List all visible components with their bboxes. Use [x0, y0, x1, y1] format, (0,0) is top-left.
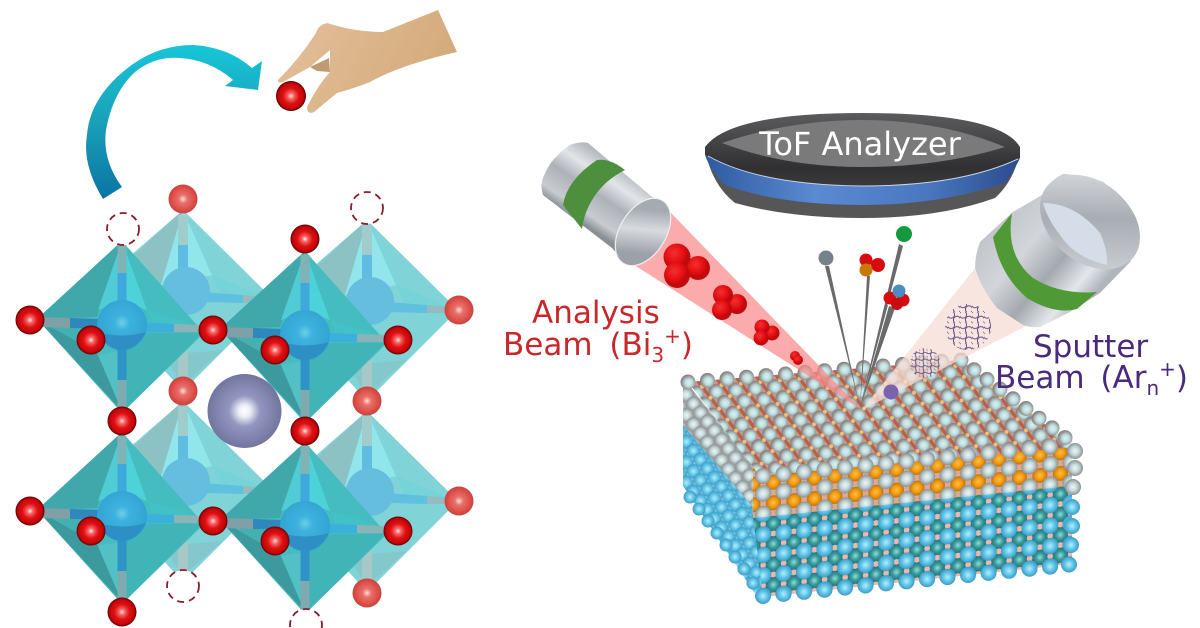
left face bottom edge atoms: [684, 490, 760, 590]
green ion: [896, 226, 912, 242]
icon: hand holding oxygen atom: [276, 10, 457, 113]
top surface: [688, 360, 1075, 476]
blue band: [705, 155, 1020, 205]
Bi cluster small: [754, 320, 780, 346]
gun end face: [1021, 155, 1159, 289]
Bi cluster large: [664, 244, 710, 288]
Ar cluster medium: [910, 348, 940, 378]
ToF analyzer: [705, 113, 1020, 218]
oxygen atom in hand: [276, 81, 306, 111]
analyzer top face: [722, 120, 1005, 167]
grey ion: [818, 250, 834, 266]
label: analysis beam: Analysis: [532, 295, 660, 331]
analyzer label: ToF Analyzer: [758, 125, 962, 163]
front face right edge atoms: [1063, 460, 1083, 553]
front face upper layer: [753, 436, 1072, 518]
analyzer body: [705, 150, 1020, 218]
front edge atoms: [755, 439, 1083, 484]
central A-site atom: [208, 374, 282, 448]
label: analysis beam: +: [664, 324, 681, 348]
Bi cluster medium: [712, 285, 747, 320]
front octahedra: [37, 241, 387, 614]
rim highlight: [708, 156, 1018, 186]
gun lens: [1043, 203, 1107, 265]
analyzer rim: [705, 113, 1020, 186]
ion tracks: [825, 244, 903, 408]
ejected ions: [818, 226, 912, 408]
front face bottom edge atoms: [755, 556, 1077, 604]
red and orange molecule: [860, 254, 885, 276]
label: analysis beam: ): [681, 327, 693, 363]
gun lens: [604, 188, 682, 276]
left face lower layer: [683, 425, 762, 600]
analysis beam: [631, 213, 862, 410]
beam cone: [862, 268, 1026, 410]
front oxygen atoms: [16, 224, 412, 626]
gun green band: [563, 160, 625, 229]
sputter gun: [975, 155, 1159, 327]
panel: perovskite crystal structure: [16, 184, 474, 628]
label: analysis beam: 3: [651, 343, 664, 367]
hand: [278, 10, 457, 113]
finger shadow: [310, 58, 330, 72]
label: sputter beam: ): [1176, 360, 1188, 396]
top surface back and right edge atoms: [680, 352, 1072, 445]
gun green band: [993, 213, 1097, 311]
left face upper layer: [683, 378, 762, 530]
label: sputter beam: +: [1159, 357, 1176, 381]
gun body: [542, 142, 670, 263]
curved arrow: [86, 45, 262, 199]
label: sputter beam: n: [1146, 376, 1159, 400]
analysis gun: [542, 142, 682, 276]
beam cone: [631, 213, 862, 410]
red and blue molecule: [884, 284, 910, 310]
label: sputter beam: Sputter: [1033, 329, 1148, 365]
Bi cluster smallest: [790, 351, 803, 365]
Ar cluster large: [945, 304, 991, 350]
label: sputter beam: Beam (Ar: [995, 360, 1147, 396]
sputter beam: [862, 268, 1026, 410]
back oxygen atoms: [168, 184, 474, 608]
Ar cluster small: [884, 384, 898, 400]
oxygen vacancies: [107, 192, 383, 628]
sample lattice block: [680, 352, 1083, 604]
label: analysis beam: Beam (Bi: [503, 327, 651, 363]
back octahedra: [91, 210, 458, 592]
gun body: [975, 174, 1139, 327]
front face lower layer: [753, 484, 1072, 597]
